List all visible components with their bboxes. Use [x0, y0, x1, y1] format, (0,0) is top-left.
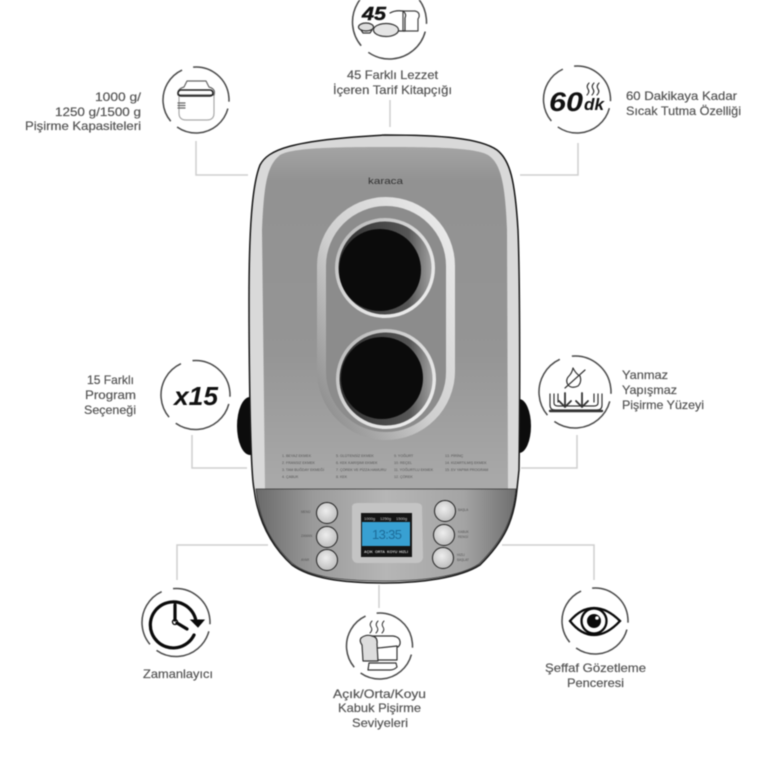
- label: Yanmaz: [622, 368, 668, 382]
- program list: 2. FRANSIZ EKMEK: [282, 461, 316, 465]
- label: [84, 373, 136, 417]
- label: Sıcak Tutma Özelliği: [626, 104, 741, 118]
- label: Kabuk Pişirme: [338, 701, 421, 715]
- button labels: BAŞLA: [458, 508, 469, 512]
- program list: 11. YOĞURTLU EKMEK: [394, 467, 434, 472]
- display: 1000g: [364, 516, 375, 521]
- label: Şeffaf Gözetleme: [545, 661, 646, 675]
- feature: capacity: [25, 64, 232, 136]
- left side handle: [237, 397, 263, 455]
- label: 15 Farklı: [87, 373, 134, 387]
- feature: non-stick: [536, 353, 704, 431]
- program list: 10. REÇEL: [394, 461, 412, 465]
- connector lines: [177, 100, 594, 608]
- upper window: [335, 218, 435, 318]
- ring: [349, 0, 430, 62]
- control panel: [256, 489, 516, 581]
- label: Program: [85, 388, 136, 402]
- lower window: [336, 329, 436, 429]
- program list: 14. KIZARTILMIŞ EKMEK: [445, 461, 487, 465]
- label: [25, 90, 142, 133]
- label: Pişirme Yüzeyi: [622, 398, 704, 412]
- program list: 3. TAM BUĞDAY EKMEĞİ: [282, 467, 324, 472]
- label: İçeren Tarif Kitapçığı: [333, 83, 452, 97]
- label: [626, 89, 741, 118]
- icon: 60 dk: 60: [549, 87, 583, 117]
- button labels: [301, 508, 470, 562]
- icon: bread with steam: [360, 621, 400, 670]
- label: [545, 661, 646, 690]
- display: 1500g: [396, 516, 407, 521]
- icon: 45 breads: 45: [361, 4, 387, 24]
- feature: recipe book: [333, 0, 452, 97]
- display bezel: [352, 503, 423, 563]
- program list: [282, 453, 488, 479]
- feature: keep warm: [541, 63, 741, 136]
- icon: 60 dk: dk: [584, 95, 606, 114]
- program list: 15. EV YAPIMI PROGRAM: [445, 468, 488, 472]
- ring: [536, 353, 614, 431]
- ring: [344, 610, 415, 682]
- button labels: AYAR: [301, 558, 310, 562]
- label: [622, 368, 704, 412]
- label: 1250 g/1500 g: [55, 105, 141, 119]
- ring: [559, 585, 631, 657]
- button labels: RENGİ: [458, 534, 468, 539]
- program list: 1. BEYAZ EKMEK: [282, 454, 312, 458]
- display: 1250g: [380, 516, 391, 521]
- program list: 5. GLÜTENSİZ EKMEK: [336, 453, 374, 458]
- program list: 12. ÇÖREK: [394, 475, 413, 479]
- brand logo: karaca: [368, 176, 404, 187]
- machine body: [249, 135, 520, 583]
- icon: clock: [150, 602, 204, 648]
- left buttons: [316, 502, 338, 570]
- program list: 4. ÇABUK: [282, 475, 299, 479]
- right side handle: [507, 399, 531, 453]
- ring: [158, 358, 233, 432]
- program list: 6. KEK KARIŞIMI EKMEK: [336, 461, 378, 465]
- label: [333, 68, 452, 97]
- feature: timer: [139, 586, 213, 681]
- label: 60 Dakikaya Kadar: [626, 89, 737, 103]
- button labels: HIZLI: [457, 553, 465, 557]
- label: Seviyeleri: [352, 716, 408, 730]
- bread machine: [237, 135, 531, 583]
- icon: 60 dk: [549, 83, 606, 117]
- program list: 13. PİRİNÇ: [445, 453, 464, 458]
- feature: window: [545, 585, 646, 690]
- icon: non-stick pan: [550, 368, 602, 411]
- program list: 7. ÇÖREK VE PİZZA HAMURU: [336, 467, 387, 472]
- right buttons: [432, 500, 456, 568]
- display: ORTA: [375, 550, 385, 554]
- button labels: BAŞLAT: [457, 558, 469, 562]
- display: 13:35: [372, 527, 402, 542]
- label: Yapışmaz: [622, 383, 677, 397]
- label: [333, 687, 426, 730]
- window surround: [317, 197, 455, 440]
- ring: [139, 586, 213, 659]
- program list: 9. YOĞURT: [394, 453, 414, 458]
- program list: 8. KEK: [336, 475, 348, 479]
- label: Seçeneği: [84, 403, 136, 417]
- ring: [541, 63, 613, 136]
- label: 45 Farklı Lezzet: [347, 68, 439, 82]
- feature: programs: [84, 358, 233, 432]
- icon: bread machine: [178, 81, 214, 120]
- upper steel panel: [262, 147, 508, 489]
- icon: x15: x15: [172, 381, 219, 411]
- feature: crust levels: [333, 610, 426, 730]
- display: AÇIK: [364, 550, 373, 554]
- label: Açık/Orta/Koyu: [333, 687, 426, 701]
- display: KOYU: [387, 550, 398, 554]
- ring: [160, 64, 232, 136]
- label: 1000 g/: [95, 90, 142, 104]
- label: Zamanlayıcı: [143, 667, 213, 681]
- display: HIZLI: [399, 550, 408, 554]
- button labels: ZAMAN: [301, 534, 313, 538]
- label: Pişirme Kapasiteleri: [25, 119, 141, 133]
- button labels: KABUK: [458, 530, 470, 534]
- button labels: MENÜ: [301, 510, 311, 514]
- icon: eye: [570, 608, 620, 635]
- label: Penceresi: [567, 676, 624, 690]
- display: [361, 513, 412, 557]
